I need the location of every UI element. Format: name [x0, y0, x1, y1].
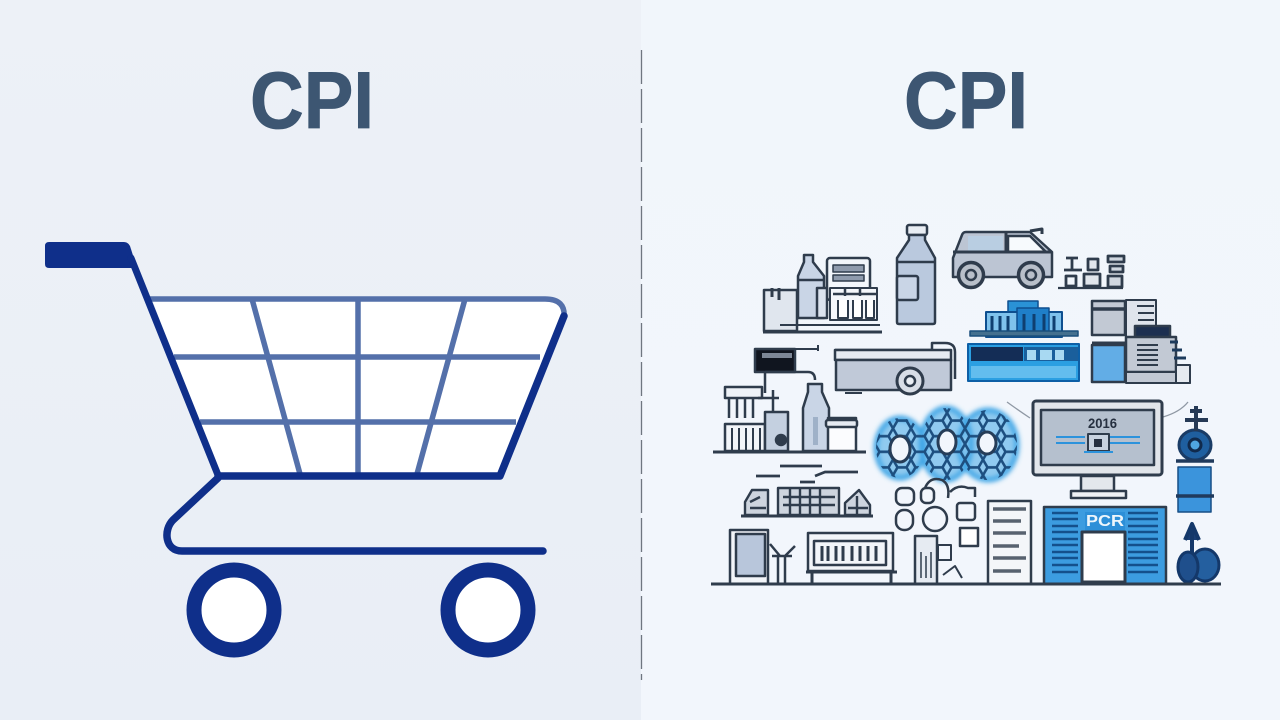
icon: blue gears cluster: [876, 408, 1017, 480]
icon: valve canister: [1176, 406, 1214, 512]
icon: van: [953, 229, 1052, 288]
icon: shopping cart: [45, 242, 564, 650]
icon: shop front: [1044, 507, 1166, 584]
icon: small goods scribble: [1058, 256, 1124, 288]
icon: small rounded blocks: [896, 479, 978, 546]
cart grid lines: [150, 299, 564, 474]
icon: computer monitor: [1007, 401, 1188, 498]
icon: large bottle: [897, 225, 935, 324]
icon: printer box: [835, 343, 955, 394]
title: right CPI: CPI: [904, 56, 1028, 146]
ground line: [711, 582, 1221, 586]
icon: blue machine: [968, 301, 1079, 381]
icon: tablet and plants: [730, 530, 795, 584]
icon: appliances stack: [1092, 300, 1190, 383]
cart wheel: right: [448, 570, 528, 650]
icon: computer monitor: 2016: [1088, 415, 1117, 431]
icon: small kiosk: [915, 536, 962, 584]
icon: shop front: PCR: [1086, 513, 1125, 530]
icon: blue plant: [1178, 524, 1219, 582]
cart handle: [45, 242, 137, 268]
icon: framed display: [806, 533, 897, 584]
cart frame: [131, 258, 564, 551]
icon cluster: goods and services: [711, 225, 1221, 584]
cart wheel: left: [194, 570, 274, 650]
title: left CPI: CPI: [250, 56, 374, 146]
icon: black machine with hose: [755, 345, 818, 393]
icon: factory shelf: [713, 384, 866, 452]
panel: left background: [0, 0, 641, 720]
icon: server tower: [988, 501, 1031, 584]
divider line: [640, 50, 642, 680]
panel: right background: [641, 0, 1280, 720]
icon: cityscape shelf: [741, 466, 873, 516]
icon: lab bottles and jars: [763, 255, 882, 332]
cart basket fill: [152, 299, 564, 476]
